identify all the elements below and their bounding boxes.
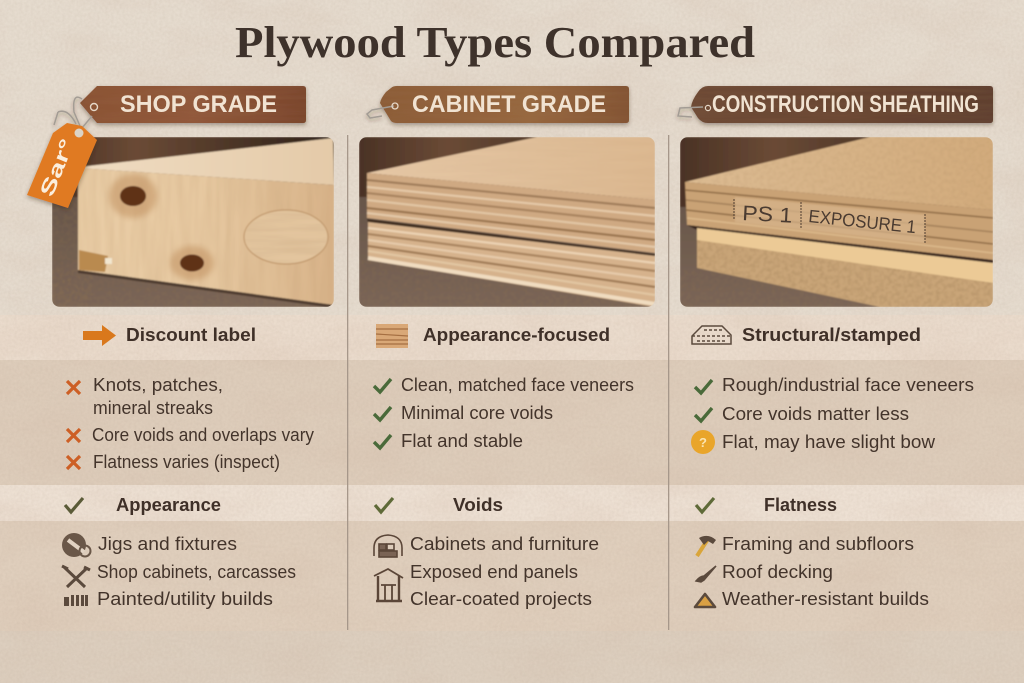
row: appearance-focused: [376, 324, 610, 348]
row: flatness: Flatness: [764, 495, 837, 515]
row: structural/stamped: Structural/stamped: [742, 324, 921, 345]
icon: paint cans: [64, 595, 88, 606]
icon: veneer swatch: [376, 324, 408, 348]
icon: house: [374, 569, 403, 601]
icon: tools: [62, 566, 90, 587]
list: shop grade drawbacks: [67, 375, 314, 472]
row: voids: [375, 495, 503, 515]
photo: stamped sheathing: [680, 137, 993, 307]
list: shop grade drawbacks: Knots, patches,: [93, 375, 223, 395]
list: shop grade uses: Shop cabinets, carcasses: [97, 562, 296, 582]
icon: arrow: [83, 325, 116, 346]
icon: weather tent: [695, 594, 715, 607]
photo: knotty board: [52, 137, 334, 308]
list: cabinet grade uses: Exposed end panels: [410, 562, 578, 582]
row: appearance-focused: Appearance-focused: [423, 324, 610, 345]
list: shop grade drawbacks: Core voids and overlaps vary: [92, 425, 314, 445]
list: construction benefits: Flat, may have slight bow: [722, 432, 936, 452]
wood label: shop grade: [80, 86, 306, 123]
list: cabinet grade uses: Cabinets and furniture: [410, 534, 599, 554]
icon: hammer: [697, 536, 716, 556]
stamp: PS 1 exposure 1: EXPOSURE 1: [808, 206, 917, 237]
icon: jig: [62, 533, 90, 557]
list: construction uses: Roof decking: [722, 562, 833, 582]
icon: roof tool: [696, 566, 716, 582]
row: discount label: [83, 324, 256, 346]
list: construction benefits: Core voids matter less: [722, 404, 909, 424]
wood label: shop grade: SHOP GRADE: [120, 91, 277, 118]
row: appearance: [65, 495, 221, 515]
wood label: cabinet grade: [367, 86, 629, 123]
list: construction benefits: Rough/industrial face veneers: [722, 375, 974, 395]
stamp: PS 1 exposure 1: PS 1: [742, 202, 793, 228]
list: shop grade uses: Painted/utility builds: [97, 589, 273, 609]
list: construction uses: Weather-resistant builds: [722, 589, 929, 609]
photo: layered plywood: [359, 137, 655, 307]
row: flatness: [696, 495, 837, 515]
list: construction uses: Framing and subfloors: [722, 534, 914, 554]
panel: shop grade: [27, 86, 334, 609]
panel: construction sheathing: [678, 86, 993, 609]
wood label: cabinet grade: CABINET GRADE: [412, 91, 606, 118]
icon: question mark: [691, 430, 715, 454]
list: cabinet grade uses: Clear-coated projects: [410, 589, 592, 609]
list: cabinet grade benefits: Clean, matched face veneers: [401, 375, 634, 395]
list: cabinet grade benefits: Minimal core voids: [401, 403, 553, 423]
wood label: construction sheathing: [678, 86, 993, 123]
list: cabinet grade benefits: Flat and stable: [401, 431, 523, 451]
title: Plywood Types Compared: [235, 18, 755, 67]
icon: question mark: ?: [699, 435, 707, 450]
list: cabinet grade benefits: [374, 375, 634, 451]
list: shop grade uses: [62, 533, 296, 609]
icon: price tag: Sar°: [36, 136, 79, 200]
row: voids: Voids: [453, 495, 503, 515]
list: construction uses: [695, 534, 929, 609]
icon: price tag: [27, 97, 97, 208]
list: cabinet grade uses: [374, 534, 599, 609]
stamp: PS 1 exposure 1: [734, 199, 925, 243]
list: shop grade drawbacks: Flatness varies (inspect): [93, 452, 280, 472]
panel: cabinet grade: [359, 86, 655, 609]
icon: stamp press: [692, 326, 731, 344]
icon: cabinets: [374, 535, 402, 557]
row: appearance: Appearance: [116, 495, 221, 515]
list: shop grade drawbacks: mineral streaks: [93, 398, 213, 418]
list: construction benefits: [691, 375, 974, 454]
row: discount label: Discount label: [126, 324, 256, 345]
list: shop grade uses: Jigs and fixtures: [98, 534, 237, 554]
